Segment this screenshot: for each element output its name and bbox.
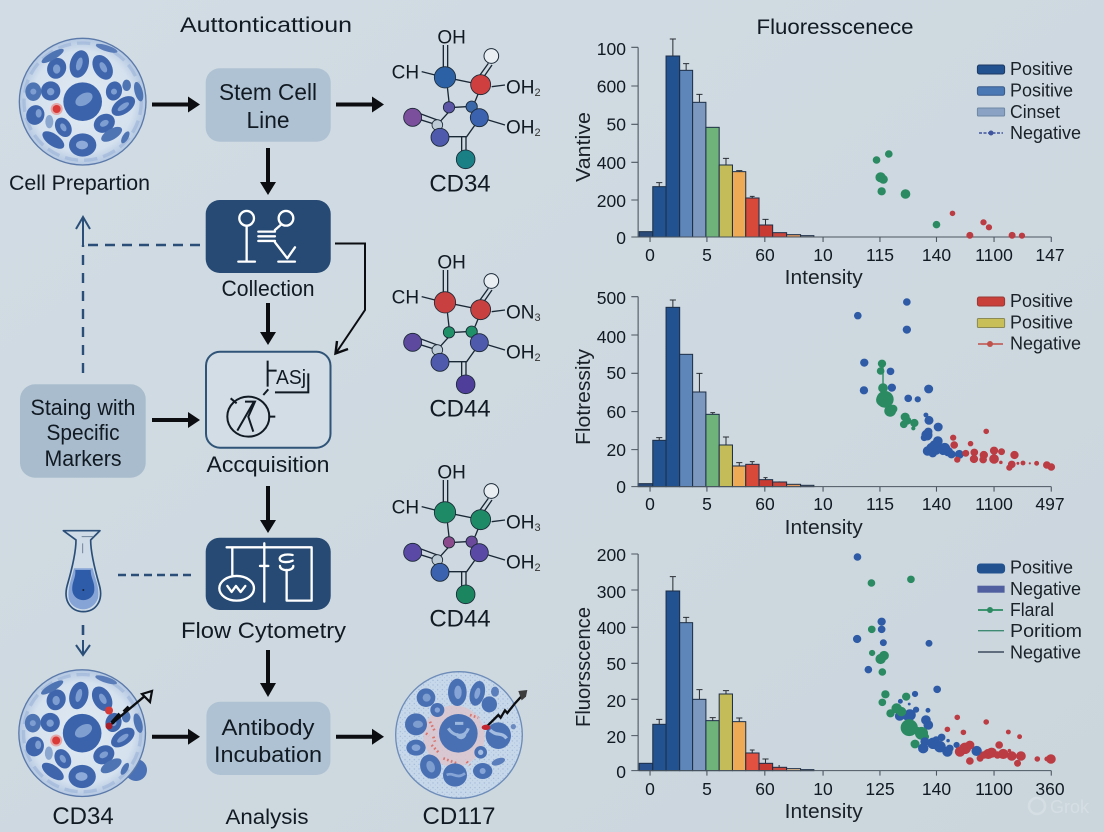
molecule: CD44 first: OH (506, 342, 534, 363)
molecule: CD44 first: 3 (534, 312, 541, 324)
legend: Poritiom (1010, 621, 1082, 641)
label: acquisition: Accquisition (206, 452, 330, 477)
y tick labels: 400 (597, 618, 626, 638)
y tick labels: 50 (607, 363, 626, 383)
molecule: CD44 second: 2 (534, 562, 541, 574)
y tick labels: 0 (616, 228, 626, 248)
y tick labels: 0 (616, 477, 626, 497)
arrow: staining to acquisition (152, 412, 200, 428)
x tick labels (645, 494, 1065, 514)
chart: top histogram and scatter (573, 39, 1081, 289)
molecule: CD44 first: CD44 (429, 396, 491, 423)
y axis label: Vantive (573, 112, 595, 182)
arrow: CD34 cell to antibody incubation (152, 729, 200, 745)
box: acquisition: ASj (276, 367, 306, 389)
right heading: Fluoresscenece (756, 16, 914, 39)
molecule: CD44 second: OH (437, 462, 466, 483)
molecule: CD44 second (392, 462, 541, 633)
icon: CD117 cell with probe (396, 672, 527, 798)
label: flow cytometry: Flow Cytometry (181, 618, 347, 643)
legend: Negative (1010, 642, 1081, 662)
y tick labels: 200 (597, 545, 626, 565)
label: analysis: Analysis (226, 805, 308, 829)
y tick labels: 0 (616, 762, 626, 782)
x tick labels: 1100 (975, 494, 1013, 514)
legend: Negative (1010, 579, 1081, 599)
y tick labels: 400 (597, 327, 626, 347)
molecule: CD34: 2 (534, 87, 541, 99)
icon: CD34 cell with probe (19, 670, 152, 796)
legend (977, 558, 1082, 662)
y tick labels (597, 545, 626, 782)
x tick labels (645, 779, 1065, 799)
y axis label: Fluorsscence (573, 607, 595, 727)
x tick labels (645, 245, 1065, 265)
x tick labels: 1100 (975, 245, 1013, 265)
box: antibody incubation (206, 702, 330, 775)
legend: Flaral (1010, 600, 1054, 620)
x tick labels: 60 (755, 245, 775, 265)
icon: collection circuit (238, 211, 295, 262)
legend: Positive (1010, 291, 1073, 311)
arrow: stem cell line to CD34 (336, 96, 384, 112)
bars and scatter points (631, 39, 1051, 242)
arrow: flow cytometry to antibody incubation (260, 650, 276, 697)
molecule: CD44 second: OH (506, 512, 534, 533)
chart: middle histogram and scatter (573, 288, 1081, 539)
y tick labels: 600 (597, 76, 626, 96)
y tick labels (597, 288, 626, 497)
watermark (1029, 797, 1090, 817)
molecule: CD44 second: OH (506, 552, 534, 573)
watermark: Grok (1050, 797, 1090, 817)
left heading: Auttonticattioun (180, 14, 352, 37)
molecule: CD44 second: 3 (534, 522, 541, 534)
x tick labels: 60 (755, 494, 775, 514)
x tick labels: 140 (922, 779, 951, 799)
arrow: antibody incubation to CD117 cell (336, 729, 384, 745)
box: collection (206, 200, 331, 273)
box: staining with specific markers: Markers (44, 446, 122, 471)
legend: Positive (1010, 312, 1073, 332)
x axis label: Intensity (785, 517, 863, 539)
box: staining with specific markers (20, 384, 146, 478)
x tick labels: 140 (922, 494, 951, 514)
x tick labels: 147 (1035, 245, 1065, 265)
label: CD117: CD117 (423, 803, 495, 830)
x tick labels: 60 (755, 779, 775, 799)
x tick labels: 360 (1035, 779, 1065, 799)
x axis label: Intensity (785, 801, 863, 823)
icon: acquisition detector (227, 361, 308, 437)
x tick labels: 10 (813, 245, 833, 265)
x tick labels: 140 (922, 245, 951, 265)
molecule: CD44 first (392, 252, 541, 423)
molecule: CD44 first: 2 (534, 352, 541, 364)
arrow: collection to acquisition (260, 303, 276, 345)
dashed arrow: collection back to cell preparation (76, 217, 200, 373)
y tick labels: 20 (607, 440, 626, 460)
molecule: CD34: OH (506, 117, 534, 138)
label: collection: Collection (222, 276, 314, 301)
box: staining with specific markers: Staing with (30, 395, 136, 420)
bars and scatter points (631, 554, 1055, 776)
icon: flask (63, 531, 101, 612)
label: CD34: CD34 (52, 803, 114, 830)
box: antibody incubation: Antibody (222, 715, 315, 740)
x axis label: Intensity (785, 267, 863, 289)
legend: Positive (1010, 59, 1073, 79)
legend (977, 291, 1081, 354)
molecule: CD34: OH (506, 77, 534, 98)
y tick labels (597, 39, 626, 248)
dashed arrow: flask to CD34 cell (76, 625, 90, 655)
y tick labels: 300 (597, 582, 626, 602)
legend: Negative (1010, 123, 1081, 143)
molecule: CD44 first: ON (506, 302, 534, 323)
legend: Positive (1010, 558, 1073, 578)
y tick labels: 60 (607, 402, 626, 422)
box: acquisition (206, 352, 330, 448)
molecule: CD34: CH (392, 62, 419, 83)
x tick labels: 5 (702, 494, 712, 514)
molecule: CD44 first: CH (392, 287, 419, 308)
legend (977, 59, 1081, 143)
box: stem cell line: Stem Cell (219, 79, 317, 105)
bars and scatter points (631, 297, 1055, 492)
box: flow cytometry (206, 538, 331, 610)
x tick labels: 125 (865, 779, 895, 799)
y tick labels: 400 (597, 153, 626, 173)
box: staining with specific markers: Specific (46, 420, 120, 445)
box: stem cell line: Line (246, 107, 290, 133)
molecule: CD34: OH (437, 27, 466, 48)
chart: bottom histogram and scatter (573, 545, 1082, 823)
arrow: acquisition to flow cytometry (260, 486, 276, 533)
legend: Negative (1010, 334, 1081, 354)
x tick labels: 10 (813, 779, 833, 799)
box: antibody incubation: Incubation (214, 742, 322, 767)
x tick labels: 1100 (975, 779, 1013, 799)
elbow arrow: collection to acquisition (335, 244, 365, 354)
x tick labels: 0 (645, 779, 655, 799)
icon: flow cytometer schematic (219, 543, 312, 602)
y tick labels: 20 (607, 691, 626, 711)
y tick labels: 200 (597, 191, 626, 211)
x tick labels: 0 (645, 494, 655, 514)
molecule: CD34: 2 (534, 127, 541, 139)
y tick labels: 500 (597, 288, 626, 308)
y tick labels: 20 (607, 727, 626, 747)
legend: Cinset (1010, 102, 1060, 122)
box: stem cell line (206, 68, 331, 142)
y axis label: Flotressity (573, 349, 595, 445)
x tick labels: 115 (866, 494, 894, 514)
label: cell preparation: Cell Prepartion (9, 172, 150, 195)
x tick labels: 497 (1035, 494, 1065, 514)
x tick labels: 5 (702, 245, 712, 265)
arrow: stem cell line to collection (260, 148, 276, 195)
dashed connector: flask to flow cytometry (118, 574, 196, 576)
x tick labels: 10 (813, 494, 833, 514)
icon: cell preparation cell (19, 38, 146, 165)
x tick labels: 115 (866, 245, 894, 265)
x tick labels: 0 (645, 245, 655, 265)
molecule: CD44 second: CH (392, 497, 419, 518)
x tick labels: 5 (702, 779, 712, 799)
molecule: CD34 (392, 27, 541, 198)
y tick labels: 50 (607, 654, 626, 674)
molecule: CD34: CD34 (429, 171, 491, 198)
y tick labels: 100 (597, 39, 626, 59)
molecule: CD44 second: CD44 (429, 606, 491, 633)
legend: Positive (1010, 80, 1073, 100)
y tick labels: 50 (607, 114, 626, 134)
arrow: cell to stem cell line (152, 96, 200, 112)
molecule: CD44 first: OH (437, 252, 466, 273)
